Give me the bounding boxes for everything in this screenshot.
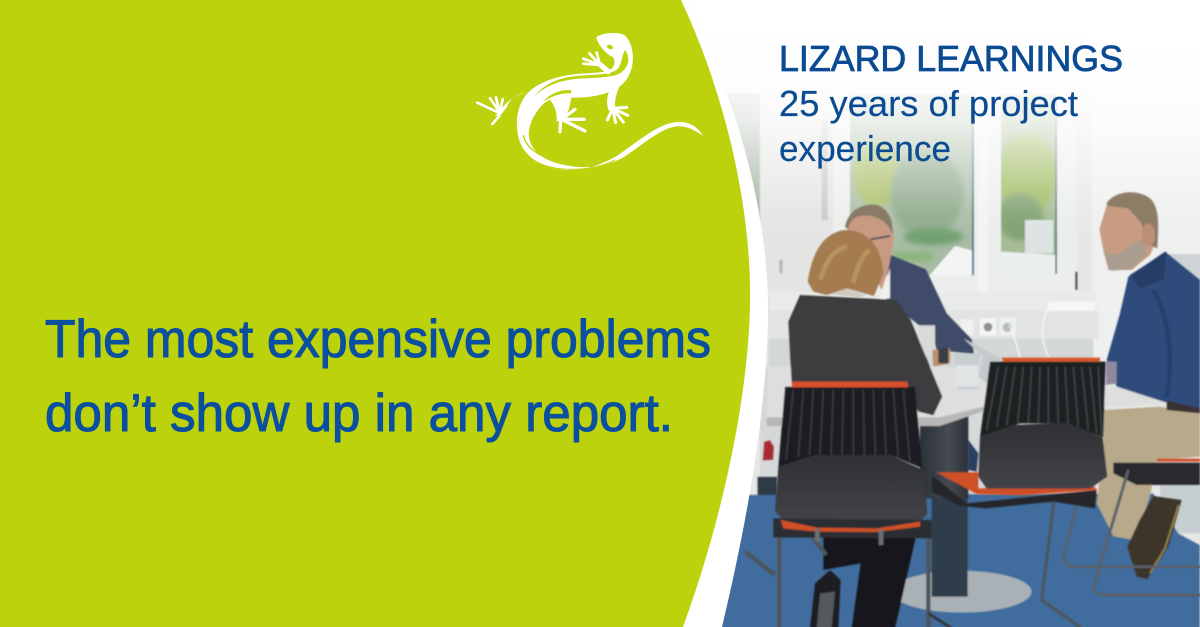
lizard hind foot at tail base	[477, 92, 527, 124]
lizard eye	[606, 44, 614, 50]
photo top white fade	[680, 0, 1200, 240]
photo wall below table	[760, 367, 1097, 500]
photo wall	[750, 134, 1200, 627]
photo main window	[833, 80, 1078, 293]
table top	[767, 366, 1170, 426]
icon: white lizard logo	[477, 33, 703, 170]
chair under the man on the right	[1063, 459, 1200, 595]
subtitle line 2: experience	[779, 128, 951, 169]
photo radiators	[1160, 254, 1200, 534]
lizard hind leg	[550, 95, 585, 132]
headline	[45, 310, 711, 443]
photo people and furniture	[745, 192, 1200, 627]
brand title block	[779, 38, 1123, 169]
lizard body mass	[517, 33, 633, 134]
man at the window	[845, 205, 974, 354]
table items: laptop, tablet, hand, glass	[918, 325, 1001, 389]
photo room background	[722, 92, 1200, 627]
lizard tail	[517, 122, 703, 170]
woman seen from behind	[788, 230, 942, 415]
lizard tail lines	[523, 135, 587, 163]
photo: meeting of three people at a table	[722, 92, 1200, 627]
green panel	[0, 0, 750, 627]
subtitle line 1: 25 years of project	[779, 83, 1078, 124]
title: lizard learnings: LIZARD LEARNINGS	[779, 38, 1123, 79]
photo carpet	[687, 493, 1200, 627]
lizard front right leg	[607, 85, 628, 123]
photo wall channel and sockets	[768, 292, 1098, 369]
lizard front left leg	[583, 53, 608, 72]
lizard thigh stripe	[543, 90, 572, 102]
middle chair	[932, 358, 1107, 627]
photo right wall	[1093, 212, 1200, 360]
left chair	[745, 382, 952, 627]
woman's legs and shoe	[810, 533, 917, 627]
headline line 2: don’t show up in any report.	[45, 384, 673, 443]
headline line 1: The most expensive problems	[45, 310, 711, 369]
photo dark floor edge and red bag	[757, 440, 777, 495]
photo table base	[892, 415, 1032, 613]
photo left window	[728, 94, 828, 318]
lizard back stripe	[534, 50, 628, 97]
man on the right	[1097, 192, 1200, 579]
